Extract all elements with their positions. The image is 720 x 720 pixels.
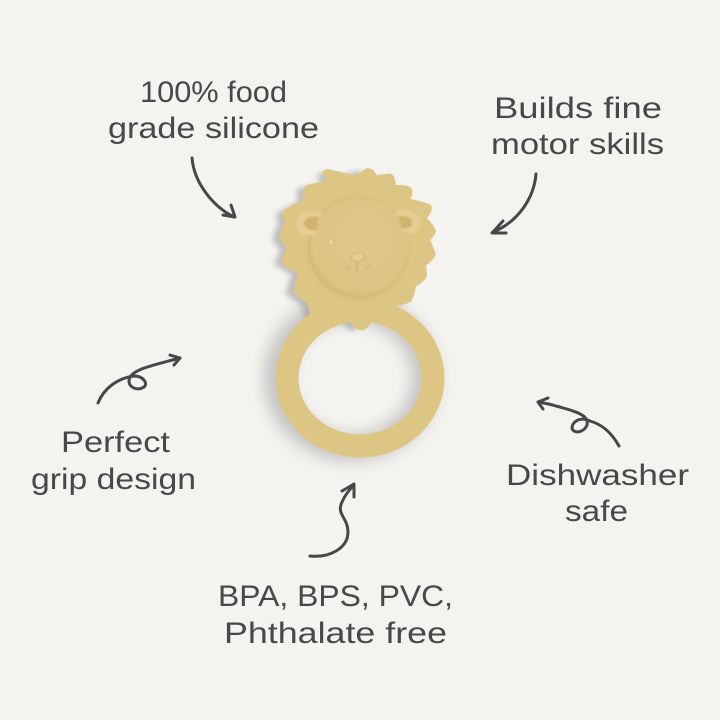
arrow: fine motor skills bbox=[492, 174, 536, 233]
lion mane bbox=[280, 169, 435, 329]
label: food grade silicone: 100% food bbox=[140, 76, 287, 109]
arrow: dishwasher bbox=[538, 398, 619, 446]
right ear bbox=[395, 210, 421, 234]
label: BPA free bbox=[218, 580, 453, 650]
arrow: food grade silicone bbox=[192, 158, 235, 217]
eyes bbox=[329, 240, 383, 244]
product: lion teether bbox=[272, 169, 435, 448]
teething ring bbox=[287, 310, 433, 446]
arrow: perfect grip bbox=[98, 355, 180, 403]
left ear bbox=[296, 211, 322, 236]
label: BPA free: Phthalate free bbox=[224, 617, 447, 650]
label: food grade silicone bbox=[108, 76, 319, 145]
label: perfect grip design bbox=[31, 426, 196, 496]
label: perfect grip design: Perfect bbox=[61, 426, 171, 459]
label: dishwasher safe: safe bbox=[565, 495, 628, 528]
mane shadow bbox=[272, 171, 427, 332]
label: fine motor skills: Builds fine bbox=[494, 92, 662, 125]
label: fine motor skills bbox=[491, 92, 664, 161]
lion head bbox=[308, 198, 408, 298]
label: food grade silicone: grade silicone bbox=[108, 112, 319, 145]
ring shadow bbox=[277, 308, 425, 448]
label: perfect grip design: grip design bbox=[31, 463, 196, 496]
arrow: BPA free bbox=[310, 484, 354, 556]
label: BPA free: BPA, BPS, PVC, bbox=[218, 580, 453, 613]
label: dishwasher safe bbox=[506, 459, 689, 528]
nose and mouth bbox=[346, 252, 370, 272]
label: fine motor skills: motor skills bbox=[491, 128, 664, 161]
label: dishwasher safe: Dishwasher bbox=[506, 459, 689, 492]
